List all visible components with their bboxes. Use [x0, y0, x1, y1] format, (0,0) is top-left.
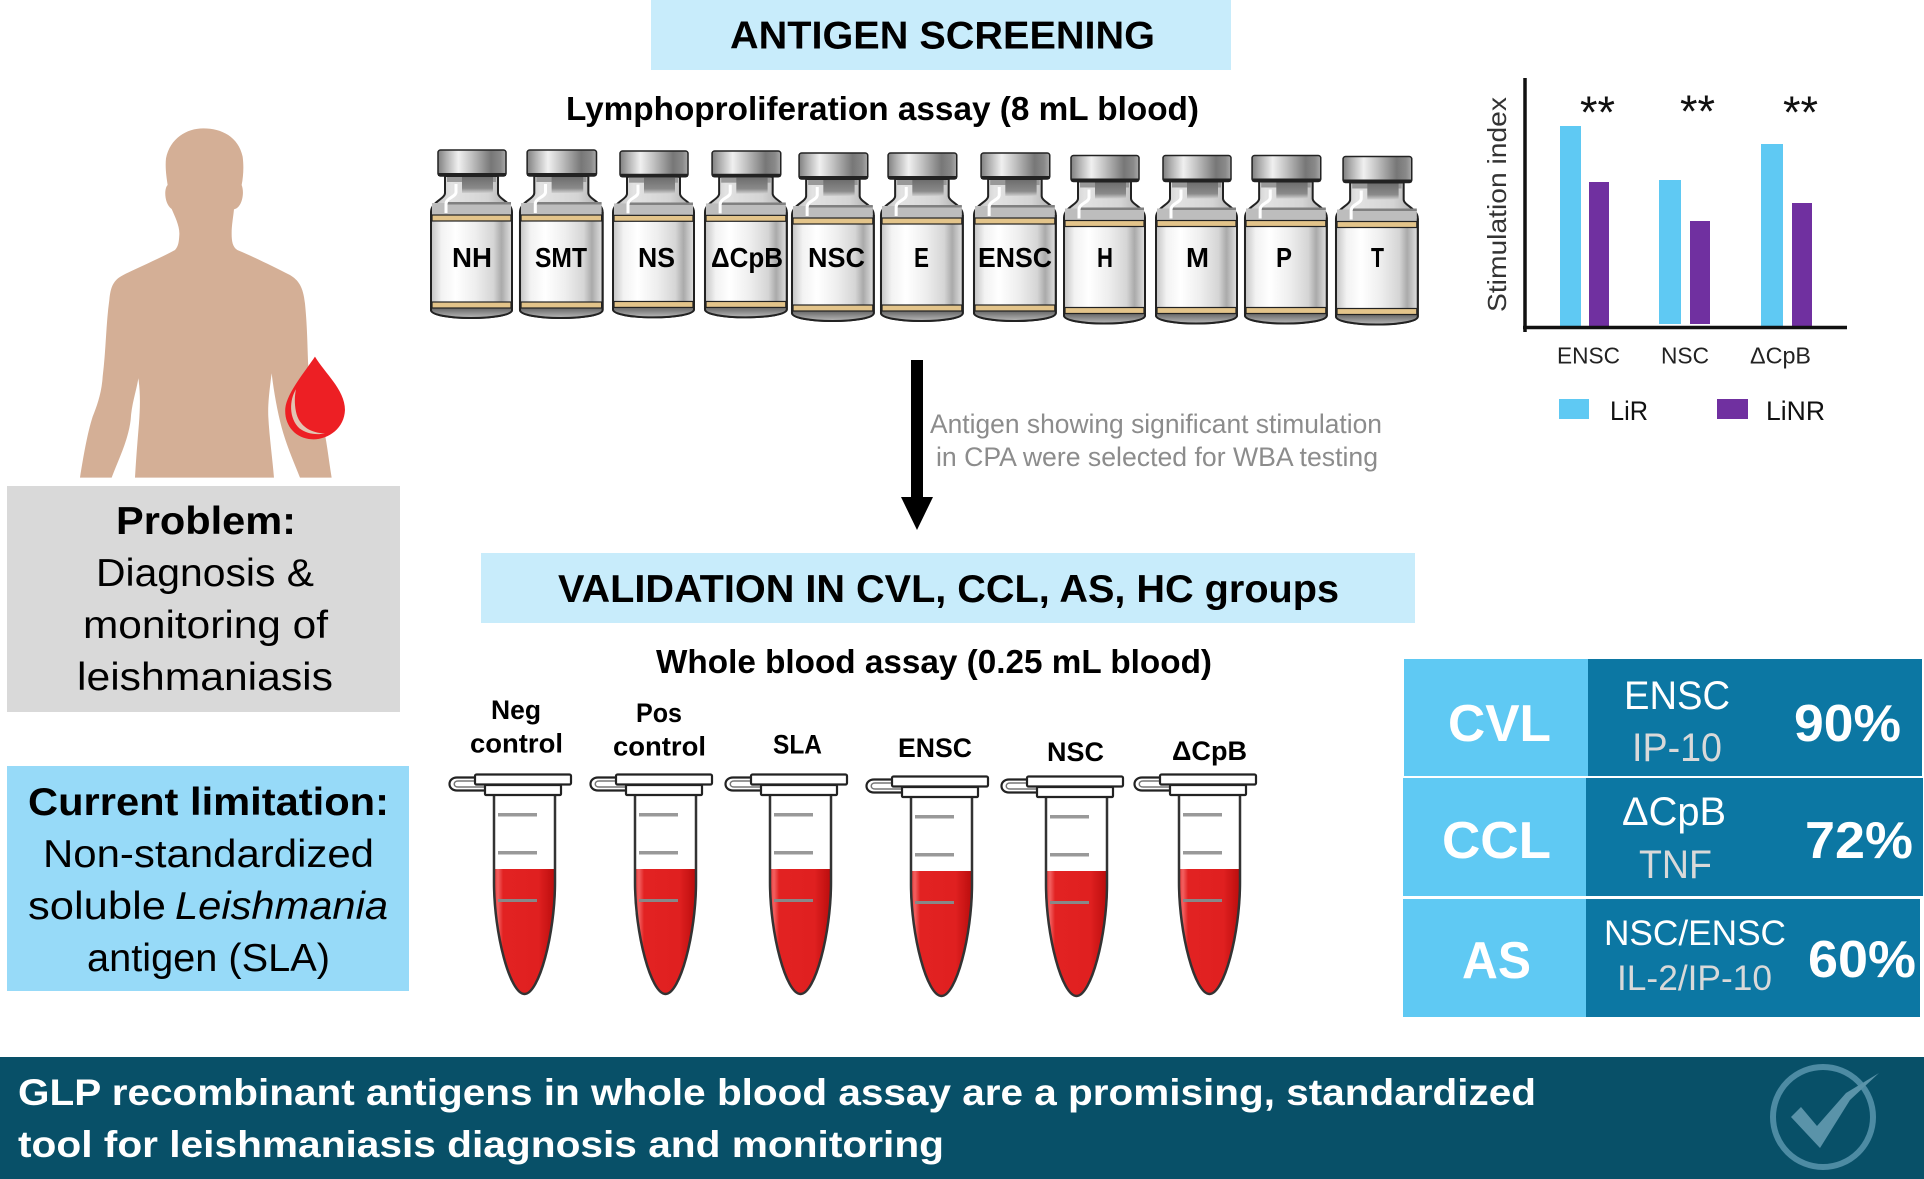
bar chart: stimulation index — [1482, 78, 1847, 426]
row: AS: IL-2/IP-10 — [1617, 959, 1772, 998]
panel: problem: leishmaniasis — [77, 656, 333, 699]
panel: problem — [7, 486, 400, 712]
tube: positive control — [590, 698, 712, 994]
heading: lymphoproliferation assay: Lymphoproliferation assay (8 mL blood) — [566, 90, 1199, 127]
vial: H: H — [1097, 242, 1113, 273]
vial: SMT: SMT — [535, 242, 587, 273]
row: CVL — [1404, 659, 1922, 776]
axes — [1523, 78, 1847, 332]
banner: antigen screening — [651, 0, 1231, 70]
vial: T — [1336, 156, 1418, 324]
x axis labels — [1557, 342, 1811, 368]
panel: current limitation: Non-standardized — [43, 833, 374, 876]
vial: ENSC — [974, 153, 1056, 321]
conclusion banner: GLP recombinant antigens in whole blood assay are a promising, standardized — [18, 1072, 1536, 1113]
row: CCL: 72% — [1805, 812, 1913, 870]
vial: NS: NS — [638, 242, 675, 273]
results table — [1403, 659, 1923, 1017]
vial: T: T — [1371, 242, 1384, 273]
significance markers — [1580, 86, 1818, 138]
x axis labels: ENSC — [1557, 342, 1620, 368]
panel: current limitation — [7, 766, 409, 991]
human silhouette with blood drop — [80, 128, 345, 478]
panel: current limitation: Leishmania — [175, 885, 388, 928]
tube: negative control: control — [470, 728, 563, 758]
row: CCL: TNF — [1639, 843, 1712, 887]
x axis labels: ΔCpB — [1750, 342, 1811, 368]
tube: positive control: control — [613, 732, 706, 762]
panel: problem: monitoring of — [83, 604, 328, 647]
row: AS: NSC/ENSC — [1604, 914, 1786, 953]
vial: NH: NH — [452, 242, 492, 273]
vial: NS — [613, 151, 694, 317]
panel: current limitation: Current limitation: — [28, 781, 389, 824]
bars: ENSC — [1560, 126, 1609, 326]
icon: human silhouette — [80, 128, 332, 478]
vial: M — [1156, 156, 1237, 324]
panel: current limitation: soluble — [28, 885, 166, 928]
tube: positive control: Pos — [636, 698, 682, 728]
legend: LiNR — [1766, 396, 1825, 426]
row of antigen vials — [431, 150, 1418, 324]
banner: antigen screening: ANTIGEN SCREENING — [730, 14, 1155, 58]
vial: ENSC: ENSC — [978, 242, 1052, 273]
significance markers: ** — [1680, 86, 1715, 137]
tube: delta CpB: ΔCpB — [1172, 736, 1247, 766]
tube: delta CpB — [1134, 736, 1256, 994]
legend: LiR — [1610, 396, 1648, 426]
row: CVL: CVL — [1448, 695, 1551, 753]
heading: whole blood assay: Whole blood assay (0.25 mL blood) — [656, 643, 1212, 680]
banner: validation: VALIDATION IN CVL, CCL, AS, HC groups — [558, 568, 1339, 611]
note: antigen selection — [930, 409, 1382, 472]
row: CCL: CCL — [1442, 812, 1551, 870]
vial: H — [1064, 156, 1145, 324]
legend — [1559, 396, 1825, 426]
row: AS: AS — [1462, 932, 1531, 990]
panel: current limitation: antigen (SLA) — [87, 937, 330, 980]
bars: delta CpB — [1761, 144, 1812, 326]
vial: M: M — [1186, 242, 1209, 273]
row of blood tubes — [450, 695, 1256, 996]
bars: NSC — [1659, 180, 1710, 324]
vial: P: P — [1276, 242, 1292, 273]
arrow: screening to validation — [901, 360, 933, 530]
icon: blood drop — [285, 357, 345, 439]
panel: problem: Diagnosis & — [96, 552, 314, 595]
row: CVL: IP-10 — [1632, 726, 1722, 770]
x axis labels: NSC — [1661, 342, 1709, 368]
tube: SLA — [726, 730, 847, 994]
vial: delta CpB: ΔCpB — [711, 242, 783, 273]
tube: negative control: Neg — [491, 695, 541, 725]
vial: NSC: NSC — [808, 242, 865, 273]
panel: problem: Problem: — [116, 500, 296, 543]
vial: E — [881, 153, 963, 321]
vial: SMT — [520, 150, 603, 318]
banner: validation — [481, 553, 1415, 623]
conclusion banner: tool for leishmaniasis diagnosis and monitoring — [18, 1124, 944, 1165]
tube: ENSC — [866, 733, 988, 996]
note: antigen selection: in CPA were selected for WBA testing — [936, 442, 1378, 472]
tube: NSC — [1002, 737, 1123, 996]
row: AS: 60% — [1808, 931, 1916, 989]
y axis title: Stimulation index — [1482, 97, 1512, 312]
tube: NSC: NSC — [1047, 737, 1104, 767]
vial: NSC — [792, 153, 874, 321]
row: CVL: ENSC — [1624, 674, 1730, 718]
row: CCL: ΔCpB — [1622, 790, 1726, 834]
conclusion banner — [0, 1057, 1924, 1179]
vial: NH — [431, 150, 512, 318]
tube: ENSC: ENSC — [898, 733, 972, 763]
row: CVL: 90% — [1794, 695, 1901, 753]
significance markers: ** — [1580, 87, 1615, 138]
vial: P — [1245, 156, 1327, 324]
tube: SLA: SLA — [773, 730, 822, 760]
row: AS — [1403, 899, 1920, 1017]
vial: delta CpB — [705, 151, 787, 317]
row: CCL — [1403, 778, 1923, 896]
tube: negative control — [450, 695, 571, 994]
vial: E: E — [914, 242, 929, 273]
note: antigen selection: Antigen showing significant stimulation — [930, 409, 1382, 439]
significance markers: ** — [1783, 87, 1818, 138]
icon: check mark in circle — [1773, 1067, 1879, 1167]
